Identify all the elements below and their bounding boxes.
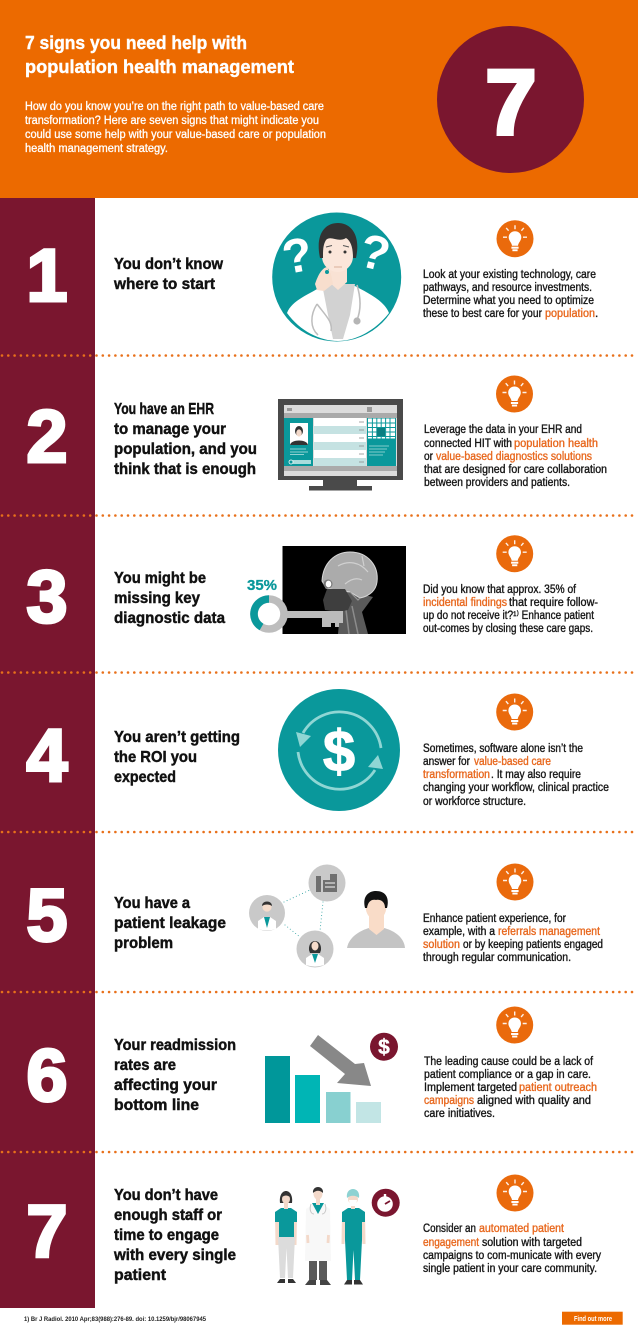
lightbulb icon (496, 864, 534, 900)
heading 4: the ROI you (114, 749, 197, 766)
heading 6: bottom line (114, 1097, 199, 1114)
heading 7: with every single (113, 1247, 236, 1264)
description 4: answer for (423, 756, 470, 768)
heading 2 (114, 401, 257, 478)
description 5: example, with a (423, 926, 496, 938)
icon: dollar cycle (278, 689, 400, 811)
heading 5 (114, 895, 226, 952)
description 3: incidental findings (423, 597, 507, 609)
heading 1: You don’t know (114, 256, 224, 273)
heading 3: diagnostic data (114, 610, 225, 627)
chart: falling bars: $ (378, 1036, 390, 1059)
description 4: Sometimes, software alone isn’t the (423, 743, 583, 755)
description 5: referrals management (498, 926, 601, 938)
panel: sign 3 (114, 535, 598, 635)
icon: confused doctor: ? (354, 224, 395, 283)
icon: care staff (275, 1187, 400, 1285)
number 2: 2 (26, 395, 68, 478)
heading 2: You have an EHR (114, 401, 214, 418)
heading 7: patient (114, 1267, 167, 1284)
description 4: value-based care (474, 756, 551, 768)
number 7: 7 (26, 1190, 68, 1273)
heading 7: enough staff or (114, 1207, 222, 1224)
big number badge: 7 (485, 52, 537, 154)
icon: dollar cycle: $ (323, 719, 355, 784)
description 6: The leading cause could be a lack of (424, 1056, 594, 1068)
description 6: patient compliance or a gap in care. (424, 1069, 591, 1081)
icon: EHR monitor (278, 399, 403, 490)
lightbulb icon (496, 1006, 533, 1044)
figure: nurse (275, 1191, 297, 1283)
description 1: Look at your existing technology, care (423, 269, 596, 281)
heading 6 (114, 1037, 236, 1114)
icon: x-ray with key: 35% (247, 577, 277, 594)
panel: sign 1 (113, 212, 598, 342)
heading 7: You don’t have (114, 1187, 218, 1204)
panel: sign 6 (114, 1006, 597, 1123)
description 1 (423, 269, 598, 320)
icon: referral network (249, 864, 405, 968)
lightbulb icon (496, 1174, 534, 1212)
heading 5: You have a (114, 895, 190, 912)
description 5: Enhance patient experience, for (423, 913, 566, 925)
description 4: changing your workflow, clinical practice (423, 782, 609, 794)
heading 5: patient leakage (114, 915, 226, 932)
description 1: Determine what you need to optimize (423, 295, 594, 307)
figure: doctor (305, 1187, 331, 1285)
panel: sign 2 (114, 376, 607, 490)
heading 3: missing key (114, 590, 200, 607)
description 6: care initiatives. (424, 1108, 495, 1120)
heading 4: You aren’t getting (114, 729, 240, 746)
description 7: engagement (423, 1237, 480, 1249)
intro text (25, 101, 326, 155)
description 4: transformation (423, 769, 490, 781)
description 7: Consider an (423, 1223, 476, 1235)
description 5: through regular communication. (423, 952, 571, 964)
description 2: Leverage the data in your EHR and (424, 424, 582, 436)
description 7: single patient in your care community. (423, 1263, 597, 1275)
description 2: that are designed for care collaboration (424, 464, 607, 476)
description 2 (424, 424, 607, 489)
number column (0, 198, 95, 1308)
description 7: campaigns to com-municate with every (423, 1250, 601, 1262)
number 3: 3 (26, 555, 68, 638)
description 1: population (545, 308, 595, 320)
description 1: pathways, and resource investments. (423, 282, 592, 294)
number 1: 1 (26, 234, 68, 317)
title: population health management (25, 57, 294, 77)
intro text: How do you know you’re on the right path to value-based care (25, 101, 324, 113)
description 2: connected HIT with (424, 438, 512, 450)
icon: stopwatch (372, 1189, 400, 1217)
description 7: automated patient (479, 1223, 565, 1235)
heading 7: time to engage (114, 1227, 219, 1244)
description 1: these to best care for your (423, 308, 542, 320)
heading 2: population, and you (114, 441, 257, 458)
footnote: 1) Br J Radiol. 2010 Apr;83(988):276-89. doi: 10.1259/bjr/98067945 (24, 1316, 206, 1323)
description 3: out-comes by closing these care gaps. (423, 623, 593, 635)
heading 2: think that is enough (114, 461, 256, 478)
icon: confused doctor (272, 212, 401, 342)
chart: falling bars (265, 1033, 398, 1123)
number 4: 4 (26, 714, 68, 797)
heading 3 (114, 570, 225, 627)
description 6: campaigns (424, 1095, 474, 1107)
description 6: patient outreach (519, 1082, 597, 1094)
description 2: population health (514, 438, 598, 450)
panel: sign 5 (114, 864, 603, 968)
panel: sign 4 (114, 689, 609, 811)
header panel (0, 0, 638, 198)
description 6 (424, 1056, 597, 1120)
number 6: 6 (26, 1034, 68, 1117)
find out more button (562, 1312, 623, 1325)
lightbulb icon (496, 220, 534, 257)
intro text: transformation? Here are seven signs that might indicate you (25, 115, 319, 127)
title (25, 33, 294, 77)
icon: confused doctor: ? (278, 228, 316, 285)
figure: surgeon (342, 1189, 366, 1284)
lightbulb icon (496, 694, 533, 730)
heading 4 (114, 729, 240, 786)
description 4: or workforce structure. (423, 796, 526, 808)
big number badge (437, 26, 584, 173)
heading 6: Your readmission (114, 1037, 236, 1054)
heading 3: You might be (114, 570, 206, 587)
lightbulb icon (496, 376, 533, 412)
icon: x-ray with key (247, 546, 406, 634)
heading 4: expected (114, 769, 176, 786)
description 2: between providers and patients. (424, 477, 570, 489)
heading 6: affecting your (114, 1077, 217, 1094)
description 5: or by keeping patients engaged (463, 939, 603, 951)
heading 5: problem (114, 935, 173, 952)
lightbulb icon (496, 535, 533, 572)
find out more button: Find out more (574, 1316, 612, 1323)
description 7 (423, 1223, 601, 1275)
number 5: 5 (26, 874, 68, 957)
description 1: . (595, 308, 598, 320)
description 5: solution (423, 939, 460, 951)
intro text: could use some help with your value-based care or population (25, 129, 326, 141)
intro text: health management strategy. (25, 143, 168, 155)
description 6: aligned with quality and (477, 1095, 591, 1107)
description 7: solution with targeted (482, 1237, 582, 1249)
panel: sign 7 (113, 1174, 601, 1285)
description 5 (423, 913, 603, 964)
description 2: value-based diagnostics solutions (436, 451, 592, 463)
heading 1: where to start (113, 276, 216, 293)
description 6: Implement targeted (424, 1082, 517, 1094)
description 2: or (424, 451, 433, 463)
heading 6: rates are (114, 1057, 176, 1074)
heading 1 (113, 256, 224, 293)
heading 2: to manage your (114, 421, 226, 438)
title: 7 signs you need help with (25, 33, 247, 53)
description 3: Did you know that approx. 35% of (423, 584, 577, 596)
description 3: up do not receive it?¹⁾ Enhance patient (423, 609, 595, 622)
description 3: that require follow- (509, 597, 598, 609)
description 3 (423, 584, 598, 635)
description 4: . It may also require (491, 769, 581, 781)
heading 7 (113, 1187, 236, 1284)
description 4 (423, 743, 609, 808)
